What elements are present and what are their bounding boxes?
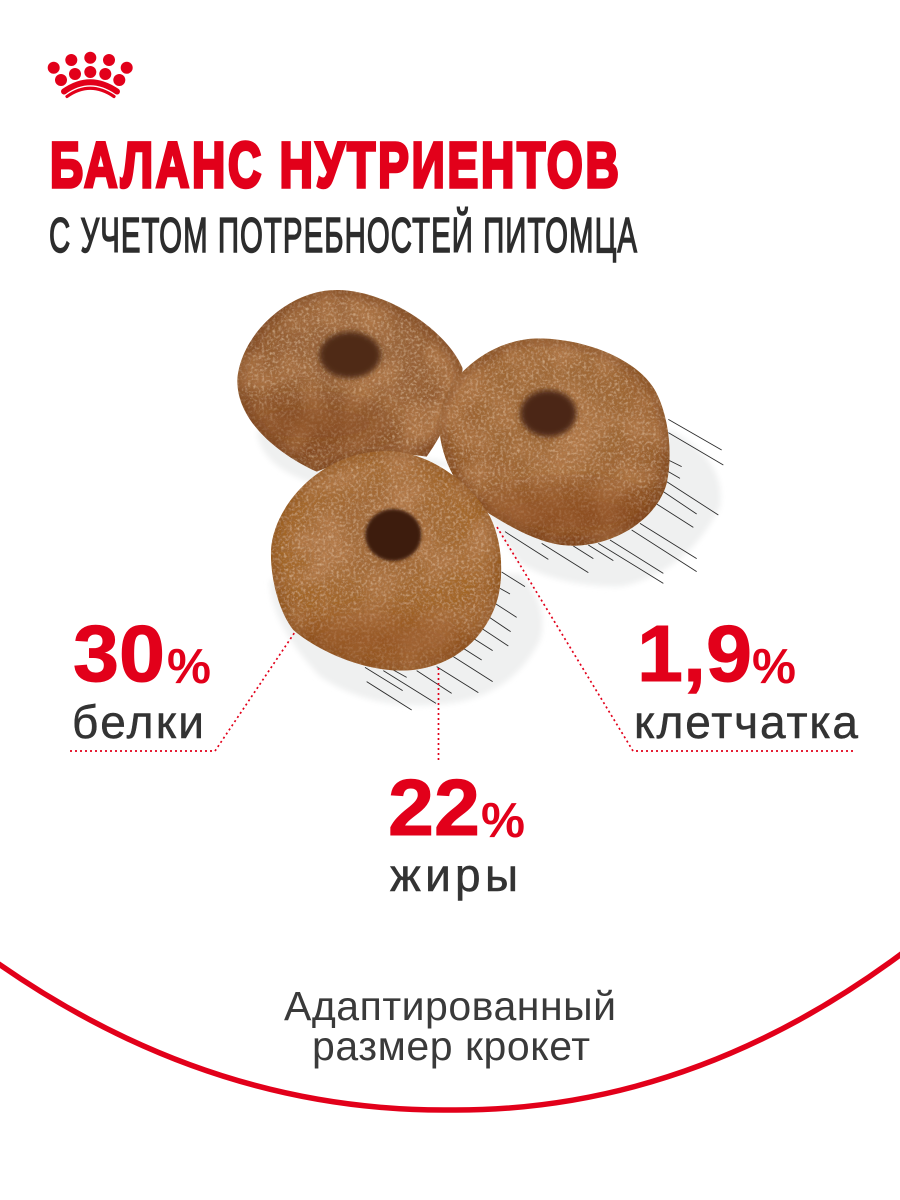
- caption: adapted kibble size: [284, 983, 616, 1069]
- stat: protein 30%: %: [167, 640, 211, 694]
- kibble shadows: [257, 430, 721, 706]
- icon: royal crown logo: [48, 52, 133, 96]
- callout: protein leader line: [70, 632, 295, 751]
- stat: fat 22%: жиры: [390, 849, 518, 901]
- title: БАЛАНС НУТРИЕНТОВ: [50, 130, 619, 201]
- bottom red arc: [0, 952, 900, 1110]
- stat: protein 30%: [72, 609, 211, 748]
- stat: protein 30%: белки: [72, 696, 204, 748]
- kibble: front: [268, 448, 505, 673]
- stat: fibre 1,9%: [634, 609, 858, 748]
- callout: fibre leader line: [497, 527, 853, 751]
- hatching lines: [365, 419, 723, 710]
- stat: fibre 1,9%: 1,9: [637, 609, 752, 698]
- subtitle: С УЧЕТОМ ПОТРЕБНОСТЕЙ ПИТОМЦА: [49, 207, 637, 263]
- stat: protein 30%: 30: [73, 609, 165, 698]
- kibble: right: [437, 335, 673, 548]
- kibble: top left: [233, 287, 467, 477]
- caption: adapted kibble size: Адаптированный: [284, 983, 616, 1029]
- stat: fat 22%: [388, 763, 525, 901]
- stat: fat 22%: 22: [388, 763, 480, 852]
- stat: fat 22%: %: [481, 794, 525, 848]
- stat: fibre 1,9%: клетчатка: [634, 696, 858, 748]
- caption: adapted kibble size: размер крокет: [312, 1023, 590, 1069]
- kibble illustration: [233, 287, 723, 710]
- callout: fat leader line: [438, 668, 440, 762]
- stat: fibre 1,9%: %: [752, 640, 796, 694]
